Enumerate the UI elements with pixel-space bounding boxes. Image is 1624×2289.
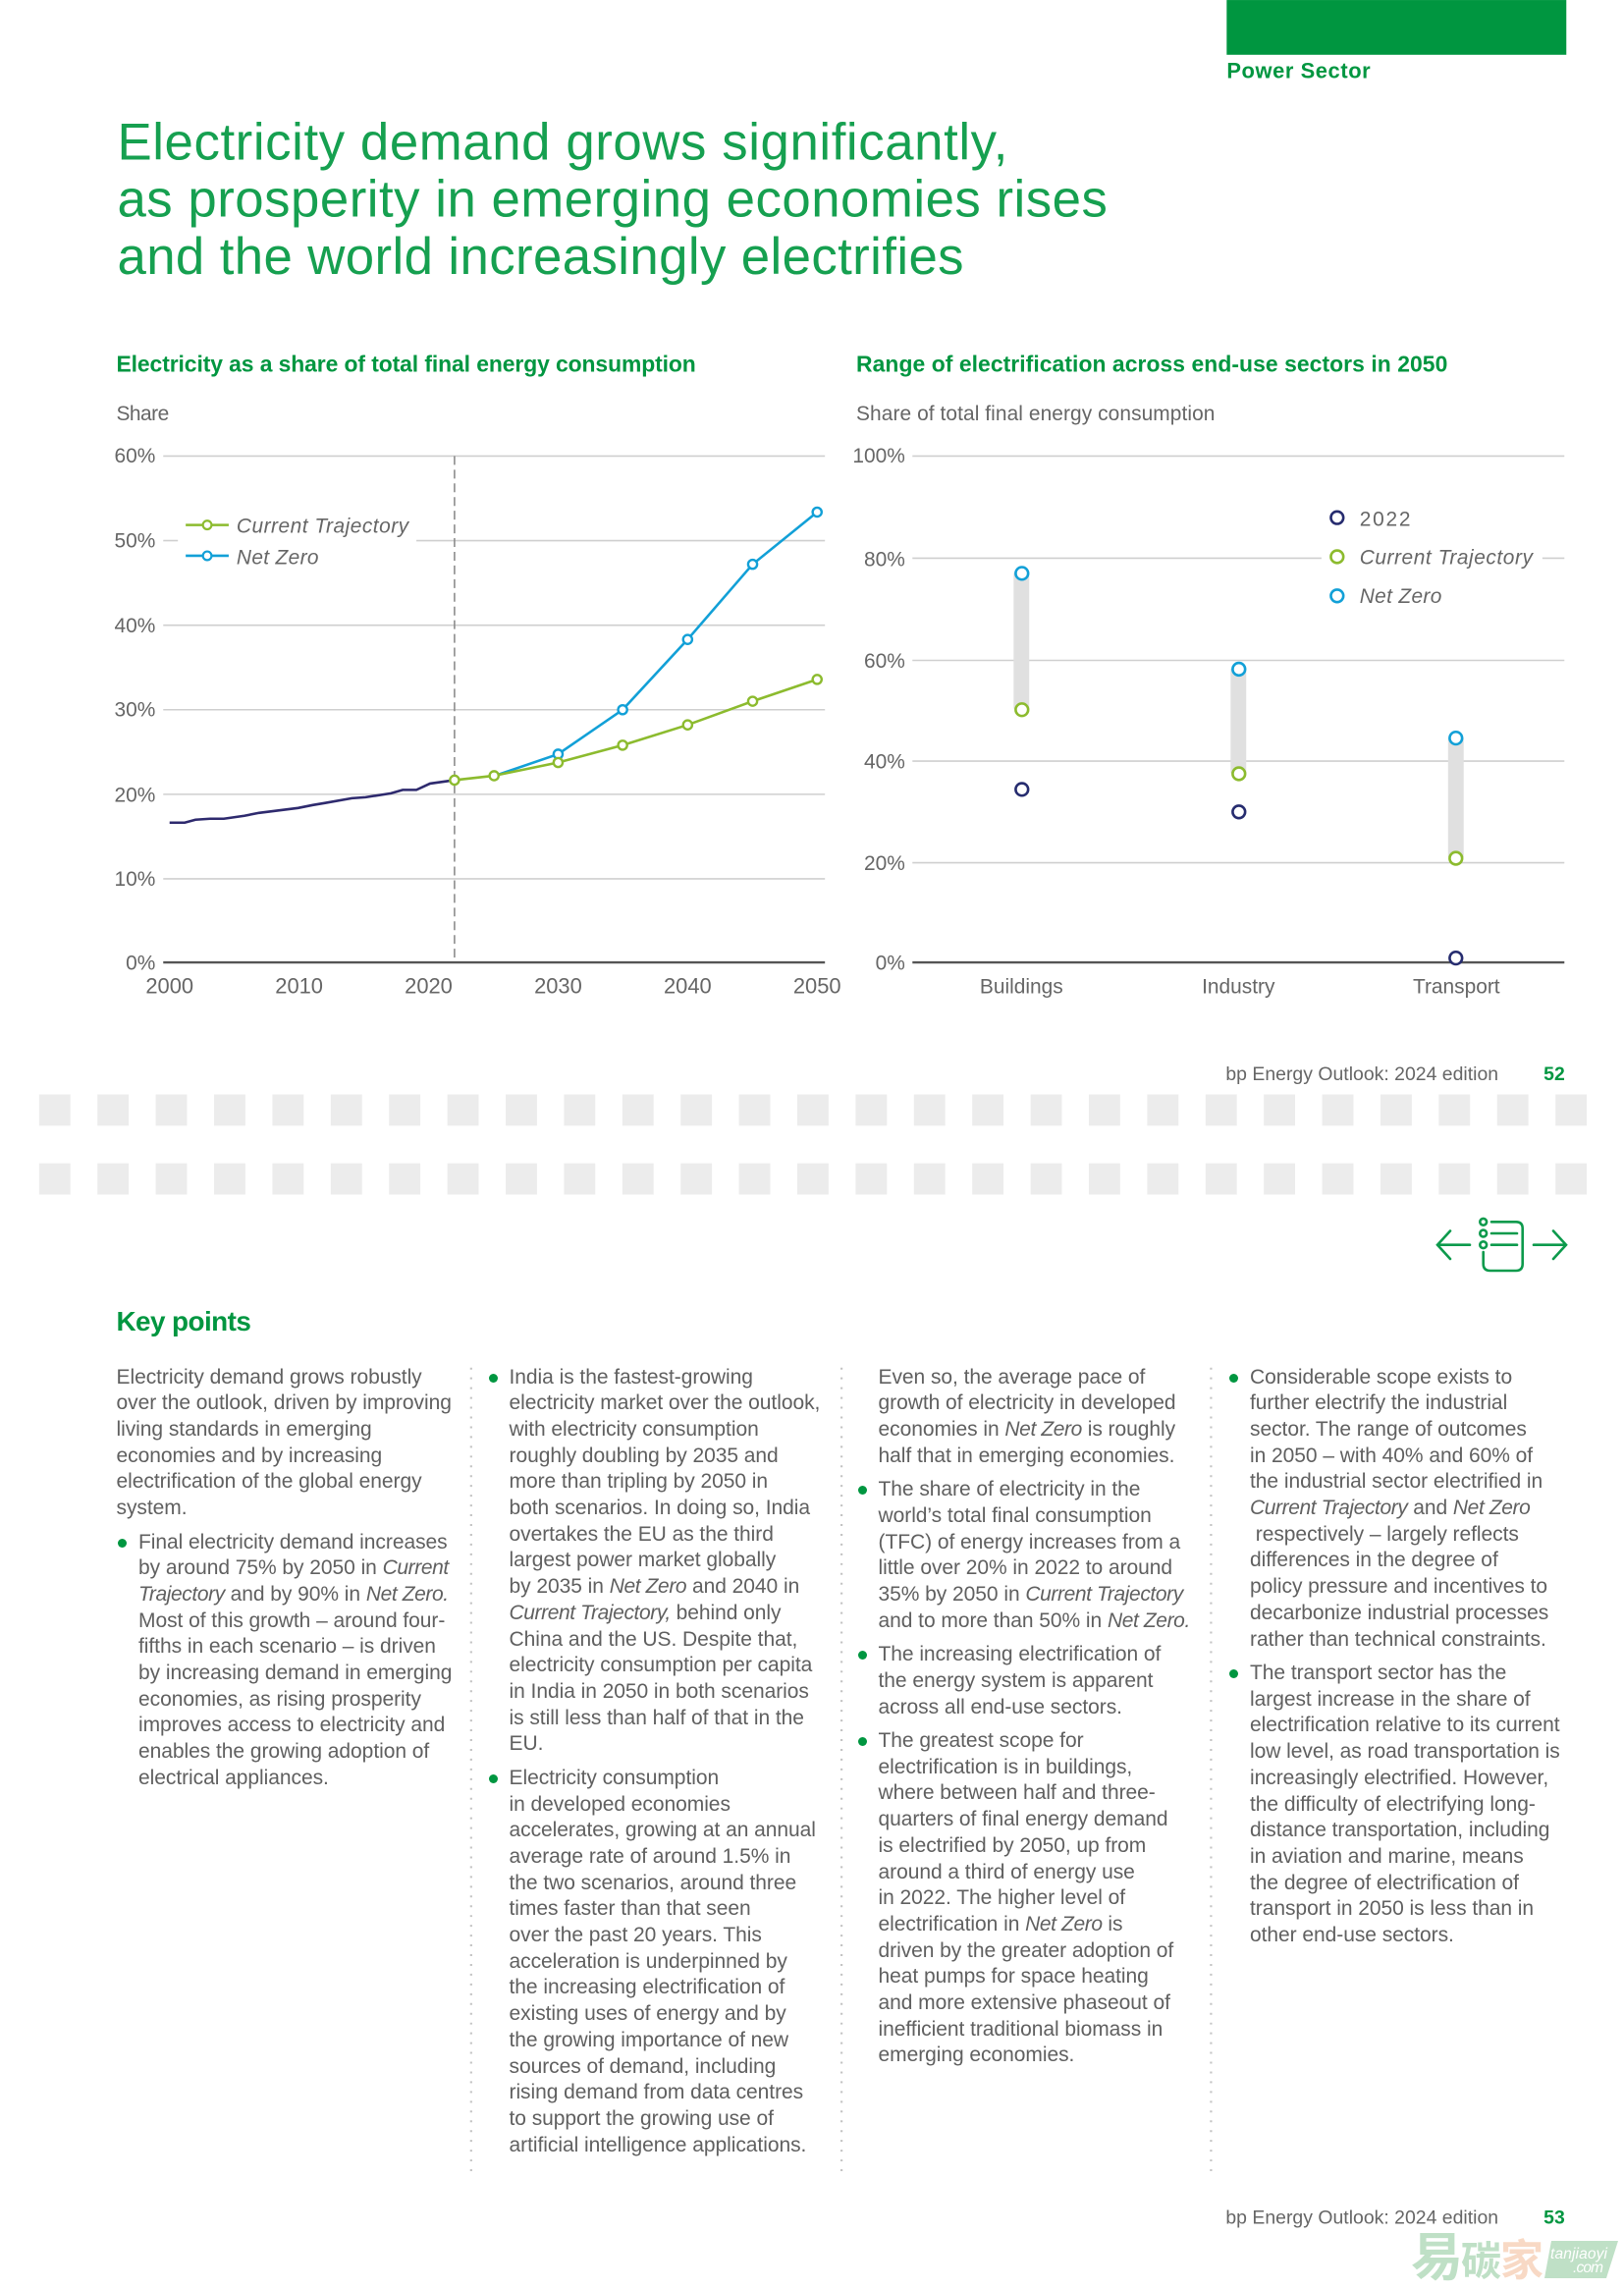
range chart: electrification by end-use sector: 100%: [852, 445, 905, 467]
text column 4: the industrial sector electrified in: [1250, 1470, 1543, 1493]
bullet: buildings: [858, 1729, 1174, 2066]
bullet: developed economies: [489, 1767, 816, 2156]
legend: line chart: [186, 516, 410, 569]
text column 4: respectively – largely reflects: [1256, 1523, 1519, 1546]
text column 2: by 2035 in Net Zero and 2040 in: [509, 1575, 799, 1598]
range chart: electrification by end-use sector: [852, 445, 1564, 998]
line chart: electricity share of final energy consumption: 2010: [275, 973, 323, 998]
bullet: share of electricity: [858, 1478, 1190, 1632]
bullet: buildings: where between half and three-: [878, 1781, 1156, 1804]
bullet: final electricity demand: electrical appliances.: [138, 1767, 329, 1789]
text column 1: electrification of the global energy: [116, 1470, 422, 1493]
bullet: share of electricity: world’s total final consumption: [878, 1504, 1152, 1527]
range chart: electrification by end-use sector: 40%: [864, 750, 905, 773]
bullet: developed economies: rising demand from data centres: [509, 2081, 803, 2103]
text column 1: economies and by increasing: [116, 1444, 382, 1467]
text column 1: over the outlook, driven by improving: [116, 1391, 452, 1414]
heading: key points: Key points: [116, 1306, 251, 1336]
range bars: [1013, 572, 1464, 857]
watermark: tanjiaoyi logo: 易: [1411, 2216, 1463, 2289]
bullet: transport: transport in 2050 is less than in: [1250, 1897, 1534, 1920]
footer: page 52: bp Energy Outlook: 2024 edition: [1225, 1063, 1498, 1085]
footer: page 53: 53: [1543, 2207, 1565, 2228]
text column 2: EU.: [509, 1732, 543, 1755]
bullet: final electricity demand: by increasing demand in emerging: [138, 1662, 452, 1684]
text column 4: sector. The range of outcomes: [1250, 1418, 1527, 1441]
legend: line chart: Current Trajectory: [237, 516, 410, 538]
text column 2: both scenarios. In doing so, India: [509, 1497, 810, 1519]
text column 2: electricity market over the outlook,: [509, 1391, 820, 1414]
bullet: developed economies: to support the growing use of: [509, 2107, 774, 2130]
text column 4: differences in the degree of: [1250, 1549, 1498, 1571]
bullet: final electricity demand: Trajectory and by 90% in Net Zero.: [138, 1583, 449, 1606]
range chart: electrification by end-use sector: 60%: [864, 650, 905, 673]
watermark: tanjiaoyi logo: .com: [1573, 2260, 1603, 2276]
bullet: buildings: is electrified by 2050, up from: [878, 1834, 1146, 1857]
footer: page 52: 52: [1543, 1063, 1565, 1085]
text column 2: with electricity consumption: [509, 1418, 759, 1441]
text column 3: half that in emerging economies.: [878, 1444, 1174, 1467]
bullet: developed economies: the growing importance of new: [509, 2029, 788, 2051]
column dividers: [471, 1368, 1211, 2176]
historical line: [170, 780, 455, 823]
line chart: electricity share of final energy consumption: 60%: [114, 445, 155, 467]
text column 3: economies in Net Zero is roughly: [878, 1418, 1175, 1441]
text column 4: [1229, 1365, 1560, 1946]
title: [117, 114, 1108, 286]
bullet: developed economies: sources of demand, including: [509, 2055, 776, 2078]
line chart: electricity share of final energy consumption: 2020: [405, 973, 453, 998]
line chart: electricity share of final energy consumption: 2030: [534, 973, 582, 998]
text column 3: Even so, the average pace of: [878, 1365, 1145, 1389]
bullet: final electricity demand: improves access to electricity and: [138, 1714, 445, 1736]
markers: net zero: [1015, 568, 1462, 744]
text column 4: in 2050 – with 40% and 60% of: [1250, 1444, 1533, 1467]
watermark: tanjiaoyi logo: tanjiaoyi: [1550, 2246, 1608, 2262]
section tab: green block: [1226, 0, 1566, 55]
bullet: share of electricity: (TFC) of energy increases from a: [878, 1531, 1180, 1553]
bullet: buildings: electrification in Net Zero is: [878, 1913, 1122, 1935]
bullet: developed economies: Electricity consumption: [509, 1767, 719, 1789]
bullet: developed economies: acceleration is underpinned by: [509, 1950, 787, 1973]
text column 2: China and the US. Despite that,: [509, 1628, 797, 1651]
bullet: buildings: electrification is in buildings,: [878, 1756, 1132, 1778]
bullet: end-use sectors: the energy system is apparent: [878, 1669, 1153, 1692]
net zero line: [494, 508, 822, 776]
bullet: developed economies: over the past 20 years. This: [509, 1924, 762, 1946]
bullet: final electricity demand: economies, as rising prosperity: [138, 1688, 421, 1711]
bullet: share of electricity: little over 20% in 2022 to around: [878, 1556, 1172, 1579]
bullet: final electricity demand: fifths in each scenario – is driven: [138, 1635, 436, 1658]
legend: range chart: Current Trajectory: [1360, 546, 1534, 569]
bullet: final electricity demand: Final electricity demand increases: [138, 1531, 448, 1553]
bullet: share of electricity: and to more than 50% in Net Zero.: [878, 1609, 1190, 1632]
text column 2: roughly doubling by 2035 and: [509, 1444, 779, 1467]
bullet: transport: the degree of electrification of: [1250, 1872, 1519, 1894]
text column 1: living standards in emerging: [116, 1418, 372, 1441]
bullet: transport: other end-use sectors.: [1250, 1924, 1454, 1946]
title: as prosperity in emerging economies rises: [117, 170, 1108, 228]
bullet: buildings: The greatest scope for: [878, 1729, 1084, 1752]
text column 2: electricity consumption per capita: [509, 1654, 812, 1676]
bullet: developed economies: average rate of around 1.5% in: [509, 1845, 790, 1868]
text column 3: [858, 1365, 1190, 2066]
line chart: electricity share of final energy consumption: 30%: [114, 699, 155, 722]
bullet: transport: in aviation and marine, means: [1250, 1845, 1524, 1868]
bullet: end-use sectors: across all end-use sectors.: [878, 1696, 1122, 1718]
bullet: transport: increasingly electrified. However,: [1250, 1767, 1548, 1789]
line chart: electricity share of final energy consumption: 40%: [114, 615, 155, 637]
text column 3: growth of electricity in developed: [878, 1391, 1175, 1414]
footer: page 53: bp Energy Outlook: 2024 edition: [1225, 2207, 1498, 2228]
range chart: electrification by end-use sector: Transport: [1413, 975, 1500, 998]
text column 2: largest power market globally: [509, 1549, 776, 1571]
page separator band: [39, 1094, 1587, 1195]
bullet: developed economies: in developed economies: [509, 1793, 731, 1816]
title: and the world increasingly electrifies: [117, 228, 964, 286]
bullet: end-use sectors: [858, 1643, 1161, 1718]
bullet: final electricity demand: enables the growing adoption of: [138, 1740, 429, 1763]
text column 4: further electrify the industrial: [1250, 1391, 1507, 1414]
text column 2: India is the fastest-growing: [509, 1365, 753, 1389]
line chart: electricity share of final energy consumption: 10%: [114, 868, 155, 891]
axis title: share: Share: [116, 403, 169, 425]
watermark: tanjiaoyi logo: [1411, 2216, 1618, 2289]
text column 4: policy pressure and incentives to: [1250, 1575, 1547, 1598]
bullet: final electricity demand: by around 75% by 2050 in Current: [138, 1556, 449, 1579]
range chart: electrification by end-use sector: 0%: [876, 953, 905, 975]
bullet: share of electricity: 35% by 2050 in Current Trajectory: [878, 1583, 1183, 1606]
bullet: developed economies: times faster than that seen: [509, 1897, 751, 1920]
watermark: tanjiaoyi logo: 碳: [1461, 2228, 1501, 2287]
bullet: buildings: driven by the greater adoption of: [878, 1939, 1173, 1962]
bullet: developed economies: existing uses of energy and by: [509, 2002, 786, 2025]
text column 2: overtakes the EU as the third: [509, 1523, 774, 1546]
bullet: buildings: inefficient traditional biomass in: [878, 2018, 1163, 2041]
title: Electricity demand grows significantly,: [117, 114, 1007, 172]
line chart: electricity share of final energy consumption: [114, 445, 841, 998]
text column 2: Current Trajectory, behind only: [509, 1602, 781, 1624]
line chart: electricity share of final energy consumption: 2040: [664, 973, 712, 998]
chart heading: range of electrification: Range of electrification across end-use sectors in 2050: [856, 351, 1447, 376]
legend: range chart: [1330, 509, 1534, 608]
bullet: transport: The transport sector has the: [1250, 1662, 1506, 1684]
bullet: buildings: and more extensive phaseout of: [878, 1991, 1170, 2014]
bullet: buildings: quarters of final energy demand: [878, 1808, 1167, 1830]
chart heading: electricity share: Electricity as a share of total final energy consumption: [116, 351, 696, 376]
bullet: share of electricity: The share of electricity in the: [878, 1478, 1140, 1500]
text column 4: Current Trajectory and Net Zero: [1250, 1497, 1530, 1519]
bullet: developed economies: artificial intelligence applications.: [509, 2134, 806, 2156]
bullet: final electricity demand: Most of this growth – around four-: [138, 1609, 445, 1632]
text column 2: [489, 1365, 820, 2156]
bullet: transport: low level, as road transportation is: [1250, 1740, 1560, 1763]
text column 2: is still less than half of that in the: [509, 1707, 804, 1729]
bullet: transport: the difficulty of electrifying long-: [1250, 1793, 1536, 1816]
watermark: tanjiaoyi logo: 家: [1500, 2225, 1543, 2288]
line chart: electricity share of final energy consumption: 2050: [793, 973, 841, 998]
line chart: electricity share of final energy consumption: 20%: [114, 784, 155, 806]
bullet: transport: distance transportation, including: [1250, 1819, 1549, 1841]
bullet: developed economies: the two scenarios, around three: [509, 1872, 796, 1894]
text column 1: Electricity demand grows robustly: [116, 1365, 422, 1389]
legend: range chart: 2022: [1360, 509, 1410, 531]
bullet: buildings: heat pumps for space heating: [878, 1965, 1149, 1988]
bullet: buildings: around a third of energy use: [878, 1861, 1135, 1883]
current trajectory line: [450, 675, 822, 785]
text column 1: system.: [116, 1497, 187, 1519]
range chart: electrification by end-use sector: 20%: [864, 852, 905, 875]
bullet: end-use sectors: The increasing electrification of: [878, 1643, 1161, 1665]
bullet: developed economies: accelerates, growing at an annual: [509, 1819, 816, 1841]
range chart: electrification by end-use sector: Buildings: [980, 975, 1063, 998]
axis title: share of TFC: Share of total final energy consumption: [856, 403, 1215, 425]
line chart: electricity share of final energy consumption: 2000: [145, 973, 193, 998]
text column 1: [116, 1365, 452, 1789]
legend: range chart: Net Zero: [1360, 585, 1441, 608]
bullet: final electricity demand: [118, 1531, 452, 1789]
bullet: developed economies: the increasing electrification of: [509, 1976, 785, 1998]
text column 4: decarbonize industrial processes: [1250, 1602, 1548, 1624]
range chart: electrification by end-use sector: Industry: [1202, 975, 1275, 998]
markers: 2022: [1015, 784, 1462, 964]
bullet: buildings: in 2022. The higher level of: [878, 1886, 1125, 1909]
text column 4: Considerable scope exists to: [1250, 1365, 1512, 1389]
line chart: electricity share of final energy consumption: 0%: [126, 953, 155, 975]
bullet: transport: largest increase in the share of: [1250, 1688, 1531, 1711]
bullet: transport: [1229, 1662, 1560, 1946]
bullet: buildings: emerging economies.: [878, 2044, 1074, 2066]
line chart: electricity share of final energy consumption: 50%: [114, 530, 155, 553]
text column 2: more than tripling by 2050 in: [509, 1470, 768, 1493]
legend: line chart: Net Zero: [237, 546, 319, 569]
range chart: electrification by end-use sector: 80%: [864, 548, 905, 571]
text column 4: rather than technical constraints.: [1250, 1628, 1546, 1651]
text column 2: in India in 2050 in both scenarios: [509, 1680, 809, 1703]
bullet: transport: electrification relative to its current: [1250, 1714, 1560, 1736]
icon: contents navigation with arrows: [1437, 1219, 1566, 1271]
section label: Power Sector: Power Sector: [1226, 59, 1371, 83]
markers: current trajectory: [1015, 703, 1462, 864]
